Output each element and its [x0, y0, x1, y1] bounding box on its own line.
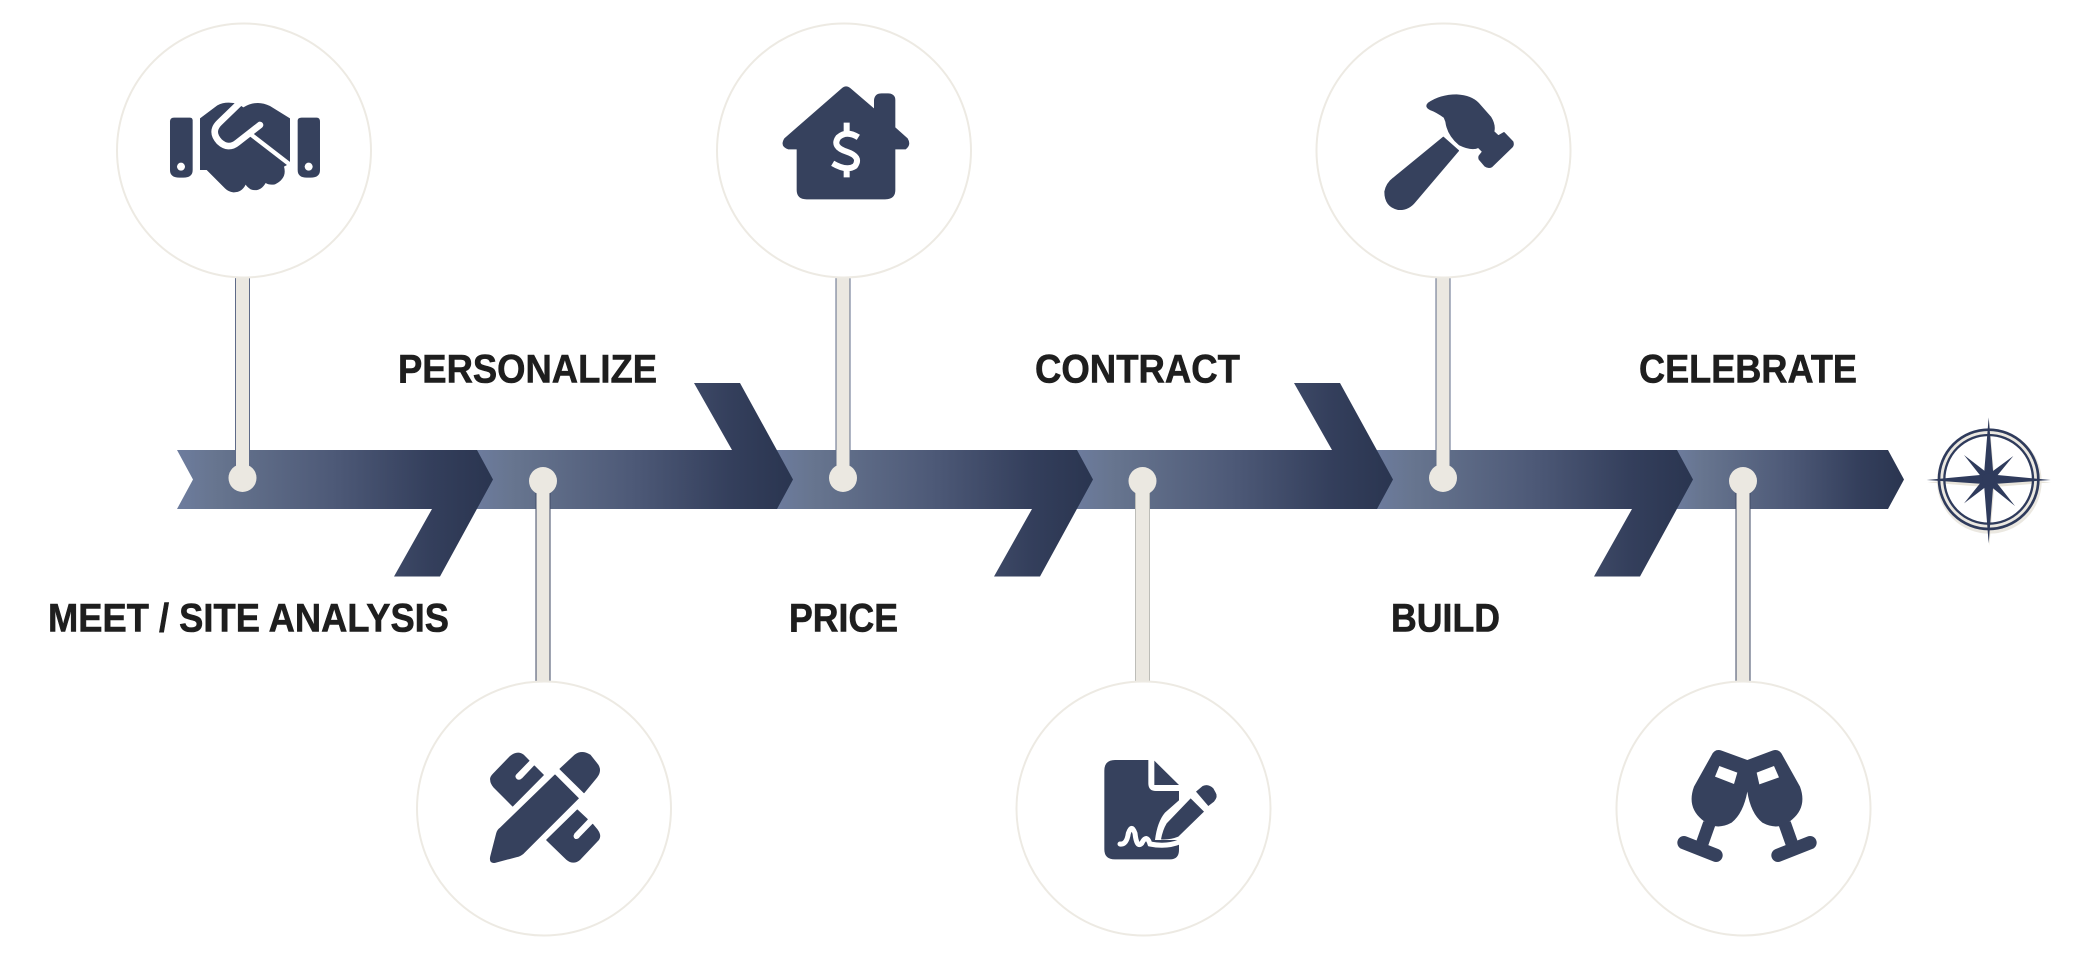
icon: handshake: [170, 103, 320, 192]
label: personalize: PERSONALIZE: [398, 348, 657, 392]
icon: hammer: [1385, 95, 1513, 209]
stem and node 6: [1729, 467, 1757, 690]
label: meet / site analysis: MEET / SITE ANALYSIS: [48, 596, 449, 640]
stem and node 1: [228, 270, 256, 492]
arrow segment 5: [1375, 450, 1693, 576]
icon: house with dollar sign: [783, 86, 909, 199]
arrow segment 4: [1075, 383, 1393, 509]
circle 6: [1616, 682, 1870, 936]
circle 5: [1316, 24, 1570, 278]
icon: pencil and ruler: [490, 752, 600, 862]
circle 1: [117, 24, 371, 278]
label: price: PRICE: [789, 596, 898, 640]
circle 2: [417, 682, 671, 936]
stem and node 5: [1429, 270, 1457, 492]
circle 4: [1016, 682, 1270, 936]
icon: clinking glasses: [1684, 750, 1810, 855]
circle 3: [717, 24, 971, 278]
label: contract: CONTRACT: [1035, 348, 1240, 392]
stem and node 3: [829, 270, 857, 492]
label: celebrate: CELEBRATE: [1639, 348, 1857, 392]
arrow segment 2: [475, 383, 793, 509]
stem and node 2: [529, 467, 557, 690]
label: build: BUILD: [1391, 596, 1500, 640]
arrow segment 1: [177, 450, 493, 576]
icon: contract signature: [1104, 760, 1217, 859]
arrow segment 6: [1675, 450, 1904, 509]
arrow segment 3: [775, 450, 1093, 576]
stem and node 4: [1128, 467, 1156, 690]
icon: compass star: [1927, 417, 2051, 546]
